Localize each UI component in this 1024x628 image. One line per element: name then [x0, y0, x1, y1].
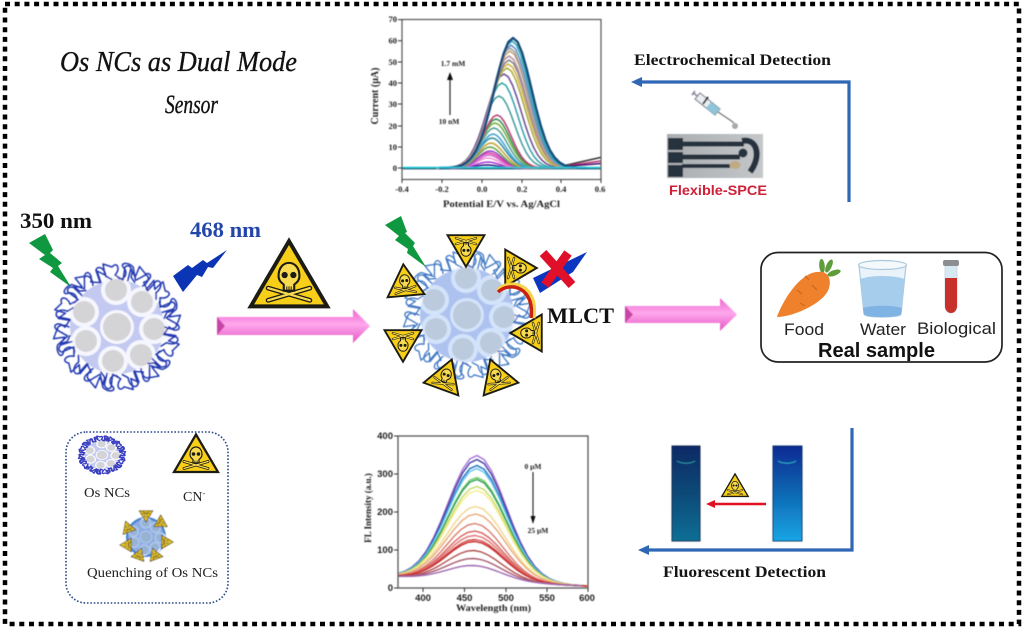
legend: quenching label: Quenching of Os NCs — [87, 566, 218, 581]
chart: current vs potential: 0.2 — [517, 184, 527, 194]
chart: FL intensity vs wavelength: 500 — [498, 593, 514, 604]
electrochemical detection heading: Electrochemical Detection — [634, 52, 831, 69]
legend: Os NCs icon — [78, 436, 126, 475]
title — [60, 46, 297, 119]
chart: FL intensity vs wavelength: 0 μM — [525, 462, 541, 471]
chart: current vs potential: 50 — [388, 57, 397, 67]
SPCE label: Flexible-SPCE — [669, 182, 767, 198]
sample labels: Biological — [917, 319, 996, 338]
icon: carrot — [777, 258, 842, 317]
icon: blue emission bolt — [173, 250, 227, 292]
chart: current vs potential: 70 — [388, 14, 397, 24]
bound hazard triangles — [385, 235, 542, 395]
nanocluster core — [401, 250, 533, 380]
excitation label 350 nm: 350 nm — [20, 208, 92, 233]
legend: CN label: - — [202, 489, 205, 498]
chart: current vs potential: Current (μA) — [370, 68, 381, 124]
sample labels: Water — [860, 320, 906, 339]
chart: current vs potential: 40 — [388, 78, 397, 88]
chart: FL intensity vs wavelength: 400 — [415, 593, 431, 604]
legend: quenched cluster icon — [119, 511, 173, 561]
arrow: to real sample — [625, 298, 737, 331]
chart: FL intensity vs wavelength — [360, 431, 595, 614]
legend: CN hazard icon — [174, 434, 218, 472]
Os nanocluster — [51, 262, 183, 392]
quenched nanocluster with hazards — [385, 235, 542, 395]
chart: current vs potential: Potential E/V vs. Ag/AgCl — [443, 200, 560, 210]
chart: current vs potential: 60 — [388, 36, 397, 46]
icon: cyanide hazard — [251, 241, 327, 306]
icon: hazard between cuvettes — [722, 474, 748, 496]
cuvette: quenched — [672, 446, 700, 541]
icon: green bolt on quenched cluster — [385, 216, 426, 267]
arrow: real sample to fluorescent — [638, 428, 852, 555]
real sample caption: Real sample — [818, 340, 935, 362]
icon: blue bolt crossed out — [533, 252, 587, 293]
cuvette: fluorescent — [773, 446, 802, 541]
chart: FL intensity vs wavelength: FL Intensity (a.u.) — [363, 473, 373, 543]
chart: current vs potential: 10 nM — [439, 117, 459, 126]
chart: FL intensity vs wavelength: 25 μM — [528, 526, 548, 535]
chart: current vs potential: 20 — [388, 121, 397, 131]
flexible SPCE photo — [667, 134, 763, 178]
title: Sensor — [165, 90, 219, 119]
chart: FL intensity vs wavelength: 300 — [377, 469, 393, 480]
chart: current vs potential: 0 — [393, 163, 397, 173]
sample labels: Food — [784, 320, 824, 339]
MLCT arc — [498, 285, 534, 318]
title: Os NCs as Dual Mode — [60, 46, 297, 78]
chart: current vs potential: 10 — [388, 142, 397, 152]
chart: current vs potential: -0.4 — [395, 184, 409, 194]
chart: FL intensity vs wavelength: 0 — [388, 583, 393, 594]
MLCT label: MLCT — [547, 303, 614, 328]
chart: current vs potential: 0.4 — [556, 184, 567, 194]
chart: FL intensity vs wavelength: 200 — [377, 507, 393, 518]
chart: current vs potential: 0.6 — [595, 184, 605, 194]
icon: green excitation bolt — [29, 234, 71, 287]
icon: blood test tube — [943, 260, 959, 313]
chart: current vs potential: 0.0 — [477, 184, 487, 194]
arrow: red quenching — [706, 500, 766, 508]
chart: FL intensity vs wavelength: 600 — [579, 593, 595, 604]
chart: FL intensity vs wavelength: Wavelength (nm) — [456, 603, 531, 614]
chart: FL intensity vs wavelength: 100 — [377, 545, 393, 556]
chart: current vs potential: -0.2 — [435, 184, 449, 194]
icon: glass of water — [858, 260, 906, 317]
arrow: real sample to electrochemical — [631, 77, 849, 202]
legend: CN label: CN — [183, 490, 202, 505]
chart: current vs potential: 1.7 mM — [441, 59, 465, 68]
chart: FL intensity vs wavelength: 400 — [377, 431, 393, 442]
panel: real sample — [761, 252, 1002, 362]
icon: syringe — [692, 91, 738, 129]
chart: FL intensity vs wavelength: 450 — [457, 593, 472, 604]
arrow: add cyanide — [217, 309, 370, 343]
chart: FL intensity vs wavelength: 550 — [539, 593, 555, 604]
legend: Os NCs label: Os NCs — [84, 486, 130, 501]
chart: current vs potential — [370, 14, 605, 210]
emission label 468 nm: 468 nm — [190, 217, 261, 242]
chart: current vs potential: 30 — [388, 99, 397, 109]
fluorescent detection heading: Fluorescent Detection — [663, 564, 826, 581]
panel: legend — [66, 432, 228, 603]
sample labels — [784, 319, 996, 339]
